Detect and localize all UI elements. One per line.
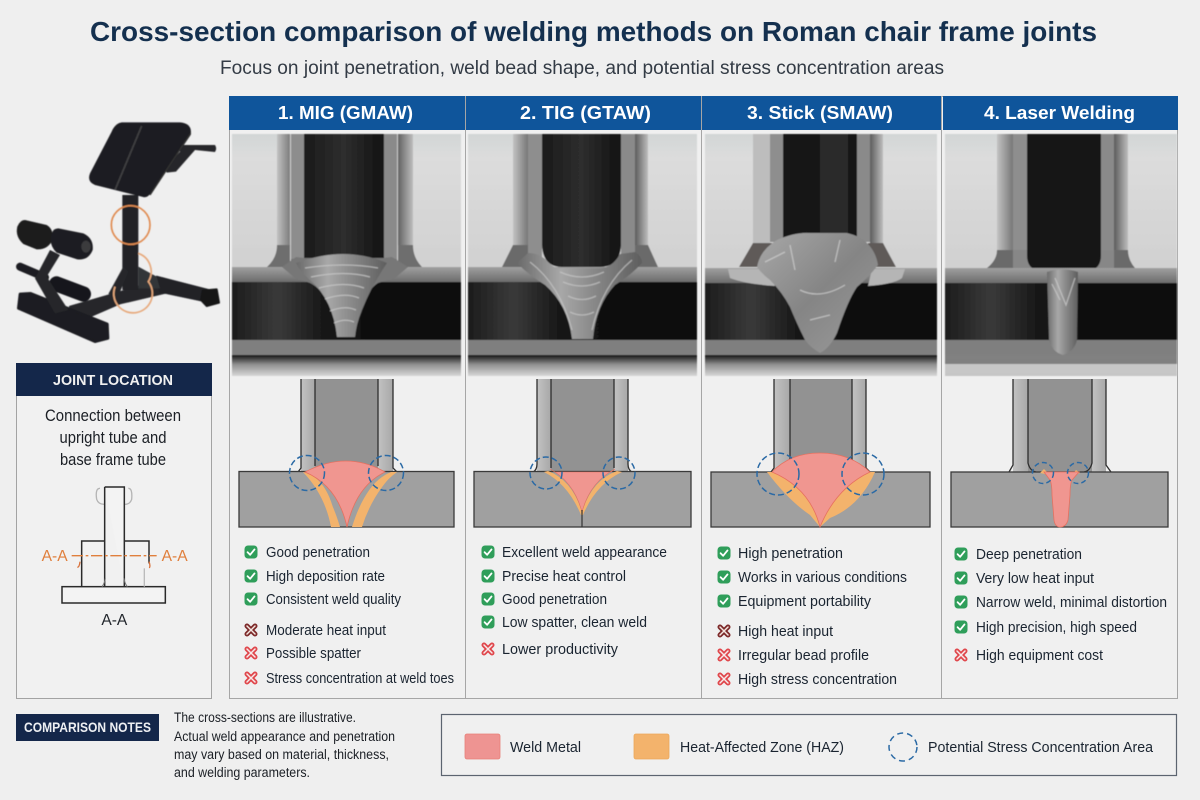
joint section diagram A-A: A-A [42,548,68,565]
panel: 4. Laser Welding [943,96,1178,664]
pro: Good penetration: Good penetration [502,591,607,608]
pro: Consistent weld quality: Consistent weld quality [266,591,401,608]
pro: Good penetration: Good penetration [266,544,370,561]
header Laser: 4. Laser Welding [984,102,1135,123]
panel: 3. Stick (SMAW) [702,96,941,688]
photo: MIG weld cross-section [232,134,461,376]
diagram: TIG weld section [474,379,691,527]
legend: stress concentration area: Potential Stress Concentration Area [928,739,1154,756]
con: Moderate heat input: Moderate heat input [266,622,387,639]
legend: heat-affected zone: Heat-Affected Zone (HAZ) [680,739,844,756]
photo: Roman chair with joint circles [17,122,219,342]
Laser pros and cons [954,546,1167,664]
comparison notes text: and welding parameters. [174,765,310,780]
pro: Deep penetration: Deep penetration [976,546,1082,563]
diagram: Stick weld section [711,379,930,527]
stress circles [530,457,635,489]
con: Possible spatter: Possible spatter [266,645,361,662]
weld metal [550,469,615,512]
joint location description [45,406,181,469]
pro: Equipment portability: Equipment portability [738,593,871,610]
pro: High deposition rate: High deposition rate [266,568,385,585]
pro: Excellent weld appearance: Excellent weld appearance [502,544,667,561]
pro: Precise heat control: Precise heat control [502,568,626,585]
header Laser [943,96,1178,130]
diagram: MIG weld section [239,379,454,527]
panel: 1. MIG (GMAW) [229,96,465,687]
weld metal [1044,472,1079,527]
panel: 2. TIG (GTAW) [466,96,701,658]
con: Stress concentration at weld toes: Stress concentration at weld toes [266,670,454,687]
comparison notes text: Actual weld appearance and penetration [174,729,395,744]
subtitle: Focus on joint penetration, weld bead shape, and potential stress concentration areas [220,58,944,79]
pro: Very low heat input: Very low heat input [976,570,1095,587]
photo: TIG weld cross-section [468,134,697,376]
photo: Stick weld cross-section [705,134,937,376]
legend: heat-affected zone [634,734,844,759]
header TIG: 2. TIG (GTAW) [520,102,651,123]
header TIG [466,96,701,130]
comparison notes badge [16,714,159,741]
heat-affected zone [1040,469,1080,476]
Stick pros and cons [718,545,907,688]
joint section diagram A-A [42,487,188,629]
diagram: Laser weld section [951,379,1168,527]
con: Irregular bead profile: Irregular bead profile [738,647,869,664]
header MIG [229,96,465,130]
legend: weld metal: Weld Metal [510,739,581,756]
photo: Laser weld cross-section [945,134,1177,376]
weld metal [305,461,385,527]
weld metal [772,453,870,527]
pro: High penetration: High penetration [738,545,843,562]
legend [442,714,1176,776]
pro: High precision, high speed: High precision, high speed [976,619,1137,636]
stress circles [1032,462,1088,484]
panel backgrounds outline for method columns [230,96,1178,698]
MIG pros and cons [244,544,454,687]
joint location header: JOINT LOCATION [53,372,173,389]
legend: weld metal [465,734,581,759]
header Stick [702,96,941,130]
header Stick: 3. Stick (SMAW) [747,102,893,123]
pro: Narrow weld, minimal distortion: Narrow weld, minimal distortion [976,594,1167,611]
joint circle upper [111,206,150,244]
title: Cross-section comparison of welding methods on Roman chair frame joints [90,16,1097,47]
stress circles [757,453,884,495]
con: Lower productivity: Lower productivity [502,641,618,658]
joint section diagram A-A: A-A [101,612,128,629]
con: High stress concentration: High stress concentration [738,671,897,688]
con: High equipment cost: High equipment cost [976,647,1104,664]
heat-affected zone [767,472,875,527]
joint location header [16,363,212,396]
joint circle lower [114,253,152,313]
legend: stress concentration area [889,733,1154,761]
comparison notes badge: COMPARISON NOTES [24,719,151,735]
TIG pros and cons [482,544,667,658]
joint section diagram A-A: A-A [162,548,188,565]
heat-affected zone [544,471,622,515]
joint location description: upright tube and [60,428,166,447]
joint location description: base frame tube [60,450,166,469]
pro: Low spatter, clean weld: Low spatter, clean weld [502,614,647,631]
panel: joint location [16,363,212,698]
stress circles [290,456,404,490]
heat-affected zone [303,472,397,527]
con: High heat input: High heat input [738,623,834,640]
comparison notes text: The cross-sections are illustrative. [174,710,356,725]
header MIG: 1. MIG (GMAW) [278,102,413,123]
comparison notes text: may vary based on material, thickness, [174,747,389,762]
comparison notes text [174,710,395,780]
pro: Works in various conditions: Works in various conditions [738,569,907,586]
joint location description: Connection between [45,406,181,425]
